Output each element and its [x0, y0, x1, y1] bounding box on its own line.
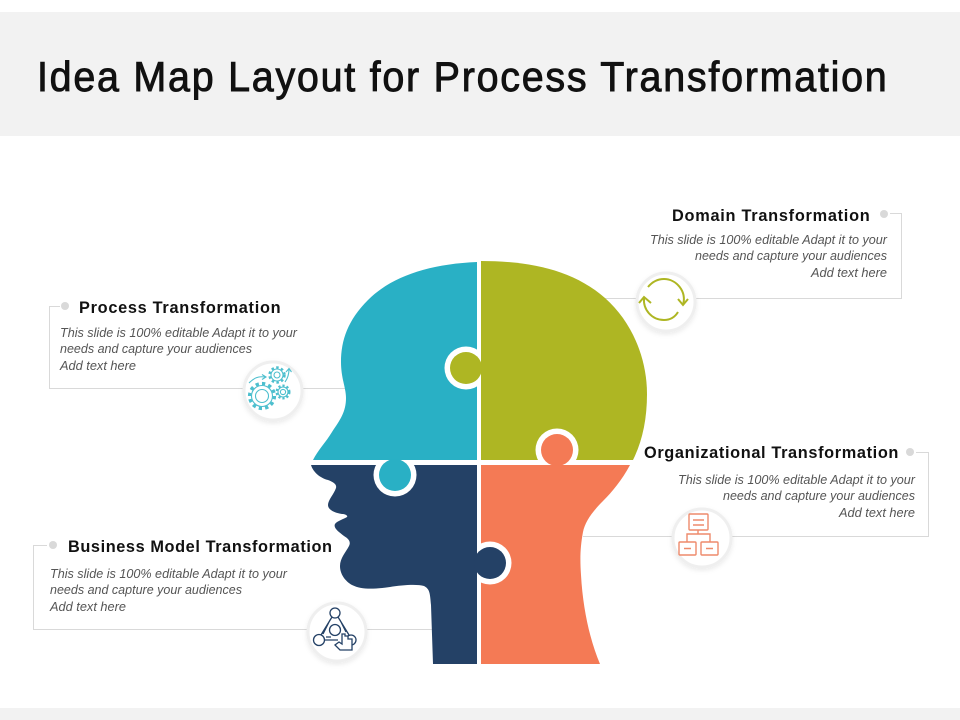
puzzle piece: olive crown: [481, 261, 647, 460]
puzzle piece: coral neck: [481, 465, 630, 664]
description: needs and capture your audiences: [50, 583, 242, 597]
knob: teal into navy: [374, 460, 416, 496]
description: [650, 233, 888, 280]
panel: process transformation: [59, 298, 298, 373]
connector: process: [50, 306, 345, 388]
puzzle piece: navy face: [311, 465, 477, 664]
description: Add text here: [49, 600, 126, 614]
description: needs and capture your audiences: [60, 342, 252, 356]
bullet dot: [880, 210, 888, 218]
description: needs and capture your audiences: [723, 489, 915, 503]
heading: Process Transformation: [79, 298, 281, 317]
title band: [0, 12, 960, 136]
connector: organizational: [583, 452, 928, 536]
heading: Business Model Transformation: [68, 537, 332, 556]
knob: olive into teal: [444, 346, 481, 390]
bullet dot: [61, 302, 69, 310]
panel: organizational transformation: [644, 443, 916, 520]
description: This slide is 100% editable Adapt it to your: [678, 473, 916, 487]
heading: Domain Transformation: [672, 206, 870, 225]
connector: business model: [34, 546, 432, 630]
icon: gears: [244, 362, 302, 420]
heading: Organizational Transformation: [644, 443, 898, 462]
panel: domain transformation: [650, 206, 888, 280]
description: This slide is 100% editable Adapt it to your: [50, 567, 288, 581]
description: [49, 567, 288, 614]
head puzzle graphic: [311, 261, 647, 664]
description: [59, 326, 298, 373]
icon: organization chart: [673, 509, 731, 567]
description: Add text here: [810, 266, 887, 280]
panel: business model transformation: [49, 537, 332, 614]
bullet dot: [49, 541, 57, 549]
puzzle piece: teal crown: [313, 262, 477, 460]
connector: domain: [605, 214, 902, 298]
bullet dot: [906, 448, 914, 456]
title: Idea Map Layout for Process Transformation: [37, 53, 887, 100]
icon: refresh arrows: [637, 273, 695, 331]
description: This slide is 100% editable Adapt it to your: [60, 326, 298, 340]
knob: coral into olive: [536, 428, 578, 465]
footer band: [0, 708, 960, 720]
knob: navy into coral: [477, 542, 512, 584]
description: needs and capture your audiences: [695, 249, 887, 263]
description: Add text here: [838, 506, 915, 520]
description: Add text here: [59, 359, 136, 373]
description: This slide is 100% editable Adapt it to your: [650, 233, 888, 247]
icon: network with hand: [308, 603, 366, 661]
description: [678, 473, 916, 520]
